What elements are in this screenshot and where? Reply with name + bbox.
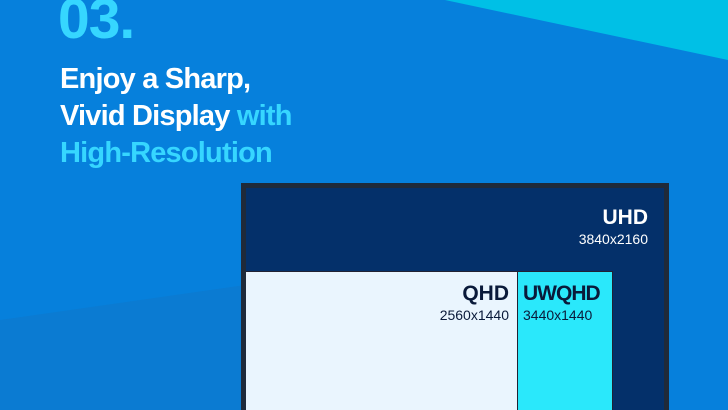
- monitor: [241, 183, 669, 410]
- heading: Enjoy a Sharp,: [60, 63, 250, 95]
- QHD label: [440, 282, 509, 323]
- panel: UHD: [246, 188, 664, 410]
- UWQHD label: [523, 282, 600, 323]
- UWQHD label: UWQHD: [523, 282, 600, 305]
- QHD label: 2560x1440: [440, 307, 509, 323]
- panel: UWQHD: [518, 271, 613, 410]
- heading: [60, 63, 292, 169]
- UHD label: [579, 206, 648, 247]
- UHD label: 3840x2160: [579, 231, 648, 247]
- heading: Vivid Display with: [60, 100, 292, 132]
- panel: QHD: [246, 271, 518, 410]
- heading: High-Resolution: [60, 137, 272, 169]
- UHD label: UHD: [602, 206, 648, 229]
- UWQHD label: 3440x1440: [523, 307, 592, 323]
- QHD label: QHD: [462, 282, 509, 305]
